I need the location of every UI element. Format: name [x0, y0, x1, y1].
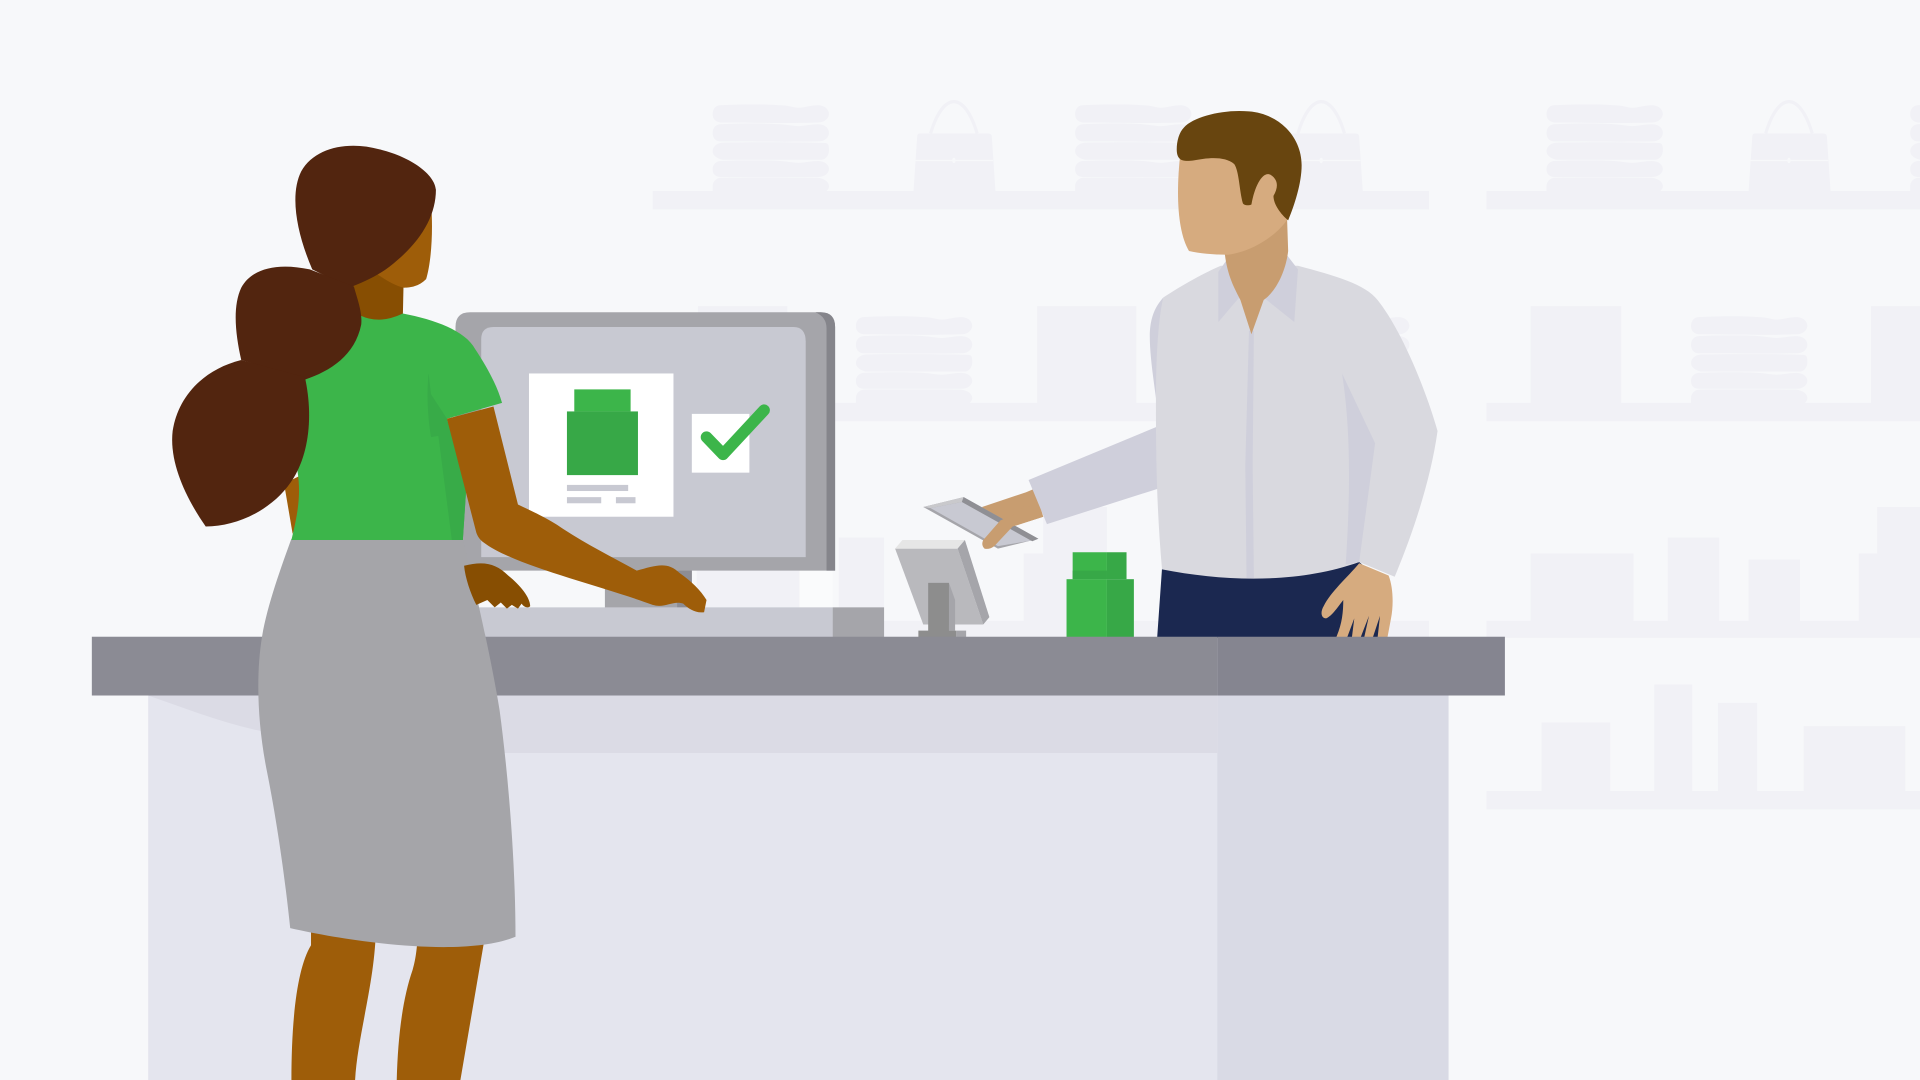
- product card: [529, 373, 673, 517]
- man: right hand: [1322, 563, 1393, 638]
- keyboard base: [478, 607, 884, 639]
- man: salesperson: [982, 111, 1438, 638]
- man: shirt: [1156, 266, 1438, 579]
- man: hair: [1177, 111, 1302, 220]
- man: collar: [1218, 253, 1298, 322]
- man: far arm sleeve: [1029, 426, 1158, 524]
- check mark box: [692, 410, 764, 473]
- man: trousers: [1157, 562, 1390, 638]
- man: face: [1178, 153, 1292, 255]
- woman: face: [370, 202, 432, 288]
- man: palm under tablet: [982, 489, 1043, 529]
- shelves: right unit: [1487, 102, 1920, 809]
- man: thumb over tablet: [982, 504, 1043, 549]
- woman: neck: [333, 260, 404, 328]
- computer monitor: [456, 312, 835, 609]
- monitor stand: [605, 571, 692, 609]
- woman: arm on keyboard: [447, 407, 707, 612]
- monitor screen: [481, 327, 806, 557]
- shelves: left unit: [653, 102, 1429, 638]
- counter top: [92, 637, 1505, 696]
- green shopping package: [1067, 552, 1134, 638]
- woman: shirt: [291, 313, 502, 540]
- woman: hand on hip: [464, 563, 530, 609]
- woman: skirt: [258, 539, 516, 947]
- man: back shadow: [1150, 298, 1163, 407]
- payment terminal: [895, 540, 989, 639]
- counter base: [148, 696, 1449, 1080]
- woman: legs: [291, 924, 485, 1080]
- woman: back arm: [284, 475, 301, 534]
- woman: hair: [172, 146, 436, 527]
- woman: customer: [172, 146, 707, 1080]
- woman: shirt shadow: [428, 373, 467, 540]
- man: shirt placket: [1245, 331, 1254, 578]
- man: neck: [1224, 214, 1288, 334]
- tablet: [923, 497, 1038, 549]
- man: shirt side shadow: [1342, 373, 1375, 564]
